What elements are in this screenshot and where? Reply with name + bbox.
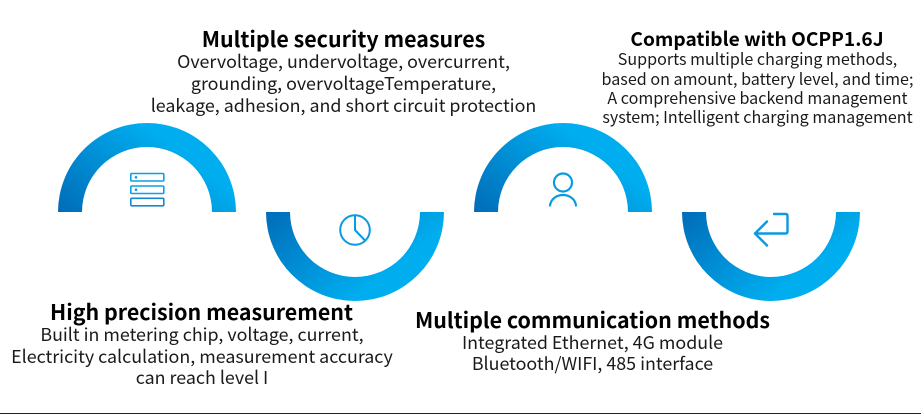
- text: OCPP description: based on amount, battery level, and time;: [602, 66, 913, 90]
- text: security measures description: [151, 48, 536, 118]
- text: security measures description: leakage, adhesion, and short circuit protection: [151, 92, 536, 118]
- text: security measures description: Overvoltage, undervoltage, overcurrent,: [177, 48, 510, 74]
- icon: server stack: [131, 174, 164, 206]
- text: measurement description: [11, 321, 394, 390]
- text: measurement description: Electricity calculation, measurement accuracy: [11, 343, 394, 369]
- heading: high precision measurement: High precision measurement: [50, 296, 353, 327]
- text: OCPP description: A comprehensive backend management: [607, 85, 908, 109]
- heading: compatible with OCPP1.6J: Compatible with OCPP1.6J: [630, 24, 884, 52]
- icon: return arrow: [755, 214, 788, 246]
- text: communication description: Bluetooth/WIFI, 485 interface: [472, 350, 713, 376]
- text: security measures description: grounding, overvoltageTemperature,: [191, 70, 496, 96]
- icon: user: [550, 174, 576, 206]
- text: OCPP description: Supports multiple charging methods,: [618, 46, 897, 70]
- block: multiple communication methods: [415, 304, 770, 376]
- block: multiple security measures: [151, 23, 536, 118]
- text: OCPP description: [602, 46, 913, 128]
- arc 3: upper semicircle: [474, 123, 652, 212]
- text: measurement description: Built in metering chip, voltage, current,: [40, 321, 364, 347]
- heading: multiple security measures: Multiple security measures: [202, 23, 485, 54]
- block: compatible with OCPP1.6J: [602, 24, 913, 128]
- text: communication description: Integrated Ethernet, 4G module: [462, 329, 723, 355]
- arc 4: lower semicircle: [682, 212, 860, 301]
- arc 2: lower semicircle: [266, 212, 444, 301]
- text: OCPP description: system; Intelligent charging management: [602, 104, 913, 128]
- text: measurement description: can reach level I: [136, 364, 268, 390]
- arc 1: upper semicircle: [58, 123, 236, 212]
- block: high precision measurement: [11, 296, 394, 390]
- icon: clock: [340, 215, 370, 245]
- bottom rule: [0, 413, 921, 414]
- heading: multiple communication methods: Multiple communication methods: [415, 304, 770, 335]
- text: communication description: [462, 329, 723, 376]
